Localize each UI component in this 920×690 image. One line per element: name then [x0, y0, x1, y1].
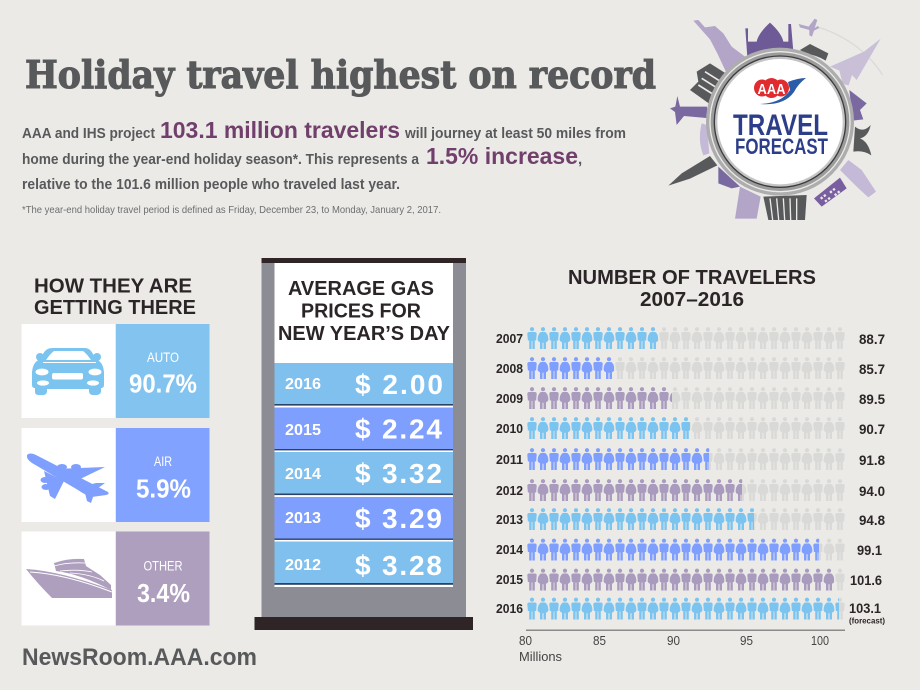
price row: 2013: [274, 497, 453, 542]
row: 2008: 2008: [496, 361, 523, 376]
sign heading: AVERAGE GAS: [288, 278, 434, 300]
value: other share: 3.4%: [137, 578, 190, 608]
sign heading: [274, 263, 453, 363]
icon: plane trail: [817, 27, 883, 75]
row: 2015: 2015: [496, 572, 523, 587]
x axis: 85: [593, 633, 606, 648]
heading: number of travelers: NUMBER OF TRAVELERS: [568, 267, 816, 289]
price row: 2015: $ 2.24: [355, 414, 442, 444]
row: 2010: [496, 417, 885, 439]
row: 2015: [496, 568, 882, 591]
icon: eiffel tower: [830, 39, 881, 85]
icon: light building: [735, 187, 761, 219]
intro text block: AAA and IHS project: [22, 125, 155, 142]
icon: car: [32, 348, 104, 395]
x axis: 80: [519, 633, 532, 648]
x axis: 100: [811, 633, 829, 648]
icon: purple building: [718, 167, 740, 188]
row: 2007: 88.7: [859, 331, 885, 347]
label: other: OTHER: [144, 558, 183, 574]
icon: right building: [849, 90, 867, 121]
x axis: 95: [740, 633, 753, 648]
row: 2012: [496, 479, 885, 501]
icon: colosseum: [763, 195, 807, 220]
price row: 2014: [274, 452, 453, 497]
intro text block: [22, 117, 626, 193]
price row: 2016: $ 2.00: [355, 369, 443, 400]
row: 2012: 2012: [496, 483, 523, 498]
AAA logo: AAA: [758, 81, 786, 98]
row: 2007: [496, 327, 885, 349]
heading: how they are getting there: HOW THEY ARE: [34, 276, 192, 298]
icon: leaning tower: [840, 160, 876, 197]
value: auto share: 90.7%: [129, 368, 197, 398]
price row: 2014: $ 3.32: [355, 458, 442, 489]
price row: 2012: 2012: [285, 557, 321, 574]
sign top bar: [262, 258, 466, 263]
row: 2009: 2009: [496, 391, 523, 406]
price row: 2012: [274, 542, 453, 587]
footer url: NewsRoom.AAA.com: [22, 644, 257, 671]
price row: 2014: 2014: [285, 466, 321, 483]
label: air: AIR: [154, 454, 172, 469]
icon: dark roof: [800, 44, 828, 61]
price row: 2015: 2015: [285, 422, 321, 439]
heading: how they are getting there: [34, 276, 196, 319]
price row: 2013: $ 3.29: [355, 503, 442, 534]
icon: cruise ship: [26, 559, 112, 598]
travel forecast badge: [668, 19, 883, 220]
x axis: 90: [667, 633, 680, 648]
row: 2008: [496, 357, 885, 379]
intro text block: 103.1 million travelers: [160, 117, 400, 143]
price row: 2016: 2016: [285, 376, 321, 393]
icon: opera house: [853, 125, 871, 155]
row: 2013: [496, 508, 885, 530]
icon: small plane: [799, 19, 819, 37]
row: 2014: 99.1: [857, 542, 882, 558]
row: 2009: 89.5: [859, 391, 885, 407]
icon: taj mahal: [745, 23, 793, 57]
row: 2016: 2016: [496, 601, 523, 616]
row: 2009: [496, 387, 885, 409]
icon: calendar building: [814, 178, 847, 207]
badge text: TRAVEL: [733, 109, 828, 142]
row: 2016: [496, 597, 885, 626]
badge rings: [706, 48, 854, 196]
row: 2013: 2013: [496, 512, 523, 527]
value: air share: 5.9%: [136, 474, 191, 504]
panel: other: [22, 532, 210, 626]
row: 2012: 94.0: [859, 483, 885, 499]
x axis: [519, 630, 845, 664]
price row: 2015: [274, 408, 453, 452]
panel: air: [22, 428, 210, 522]
price row: 2016: [274, 363, 453, 408]
panel: gas price sign: [254, 258, 473, 630]
label: auto: AUTO: [147, 350, 179, 365]
heading: how they are getting there: GETTING THERE: [34, 297, 196, 319]
price row: 2012: $ 3.28: [355, 550, 442, 581]
row: 2014: [496, 538, 882, 561]
intro text block: relative to the 101.6 million people who traveled last year.: [22, 176, 400, 193]
sign post: [262, 259, 466, 617]
badge text: FORECAST: [735, 134, 828, 159]
row: 2014: 2014: [496, 542, 524, 557]
footnote: *The year-end holiday travel period is defined as Friday, December 23, to Monday, January 2, 2017.: [22, 204, 441, 216]
x axis: Millions: [519, 649, 562, 664]
sign heading: NEW YEAR’S DAY: [278, 323, 451, 345]
row: 2008: 85.7: [859, 361, 885, 377]
row: 2016: (forecast): [849, 616, 885, 626]
heading: number of travelers: [568, 267, 816, 311]
row: 2011: 91.8: [859, 452, 885, 468]
row: 2011: [496, 448, 885, 470]
sign heading: PRICES FOR: [301, 300, 422, 322]
row: 2013: 94.8: [859, 512, 885, 528]
row: 2015: 101.6: [850, 572, 882, 588]
heading: number of travelers: 2007–2016: [640, 289, 744, 311]
icon: arch: [700, 123, 709, 155]
intro text block: home during the year-end holiday season*. This represents a: [22, 151, 420, 168]
row: 2010: 2010: [496, 421, 523, 436]
row: 2016: 103.1: [849, 600, 881, 616]
chart: travelers pictogram: [496, 327, 885, 664]
intro text block: ,: [578, 151, 582, 168]
intro text block: 1.5% increase: [426, 143, 578, 169]
icon: statue of liberty: [693, 20, 745, 73]
row: 2007: 2007: [496, 331, 523, 346]
AAA logo: [754, 78, 806, 104]
panel: auto: [22, 324, 210, 418]
icon: pen: [668, 156, 717, 186]
price row: 2013: 2013: [285, 510, 321, 527]
title: Holiday travel highest on record: [25, 52, 656, 97]
row: 2011: 2011: [496, 452, 523, 467]
icon: christ statue: [670, 96, 711, 125]
sign base: [254, 617, 473, 630]
badge text: [733, 109, 828, 159]
row: 2010: 90.7: [859, 421, 885, 437]
intro text block: will journey at least 50 miles from: [404, 125, 626, 142]
icon: colonnade: [690, 63, 728, 107]
icon: airplane: [27, 454, 109, 503]
